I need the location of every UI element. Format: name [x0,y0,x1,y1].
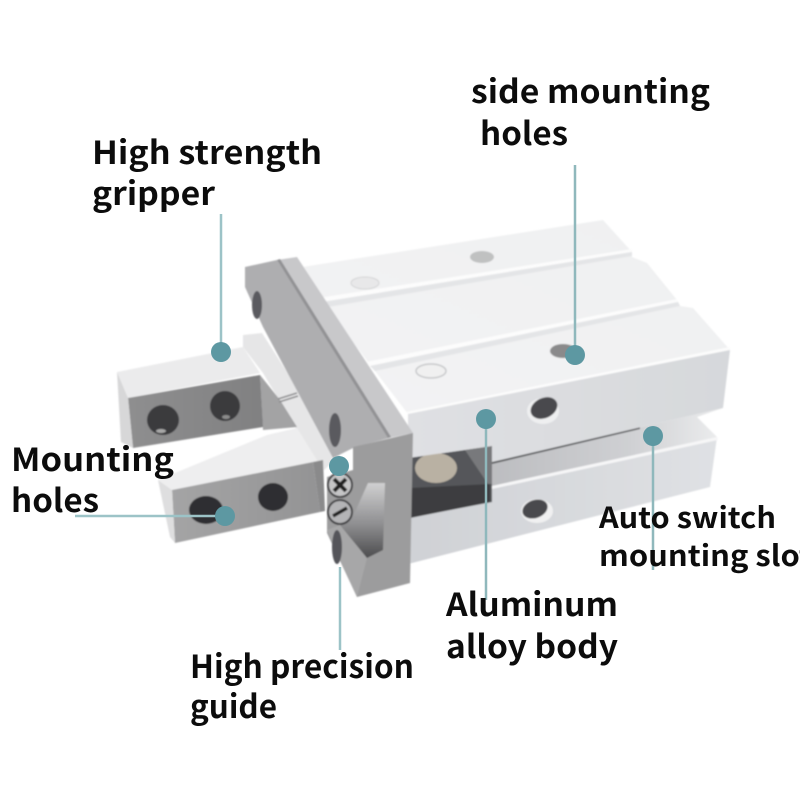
upper aluminum body side face [408,350,730,462]
callout: auto switch mounting slot [643,426,663,570]
screws [328,473,352,524]
label: high precision guide: guide [190,682,277,728]
label: mounting holes: holes [11,476,99,522]
callout: side mounting holes [565,165,585,365]
label: high precision guide: High precision [190,642,414,688]
label: side mounting holes: side mounting [471,67,710,113]
label: auto switch mounting slot: mounting slot [599,533,800,575]
body notch with bolt [408,446,492,518]
label: aluminum alloy body: alloy body [446,622,618,668]
label: aluminum alloy body [445,580,618,668]
label: aluminum alloy body: Aluminum [445,580,618,626]
label: high precision guide [190,642,414,728]
callout: aluminum alloy body [476,409,496,600]
label: high strength gripper: gripper [92,169,215,215]
pin [278,393,298,402]
callout: high strength gripper [211,214,231,362]
central slider plate [243,333,340,472]
label: high strength gripper: High strength [92,128,322,174]
label: high strength gripper [92,128,322,215]
label: side mounting holes: holes [480,109,568,155]
label: mounting holes [11,435,174,522]
label: side mounting holes [471,67,710,155]
lower aluminum body [408,408,723,564]
upper aluminum body top [296,220,730,416]
upper finger [117,347,297,448]
label: mounting holes: Mounting [11,435,174,481]
product photo: parallel gripper [117,220,730,597]
lower finger [158,428,325,543]
callout: high precision guide [329,456,349,650]
label: auto switch mounting slot: Auto switch [598,495,776,537]
callout: mounting holes [75,506,235,526]
steel guide plate [245,257,413,597]
label: auto switch mounting slot [598,495,800,575]
